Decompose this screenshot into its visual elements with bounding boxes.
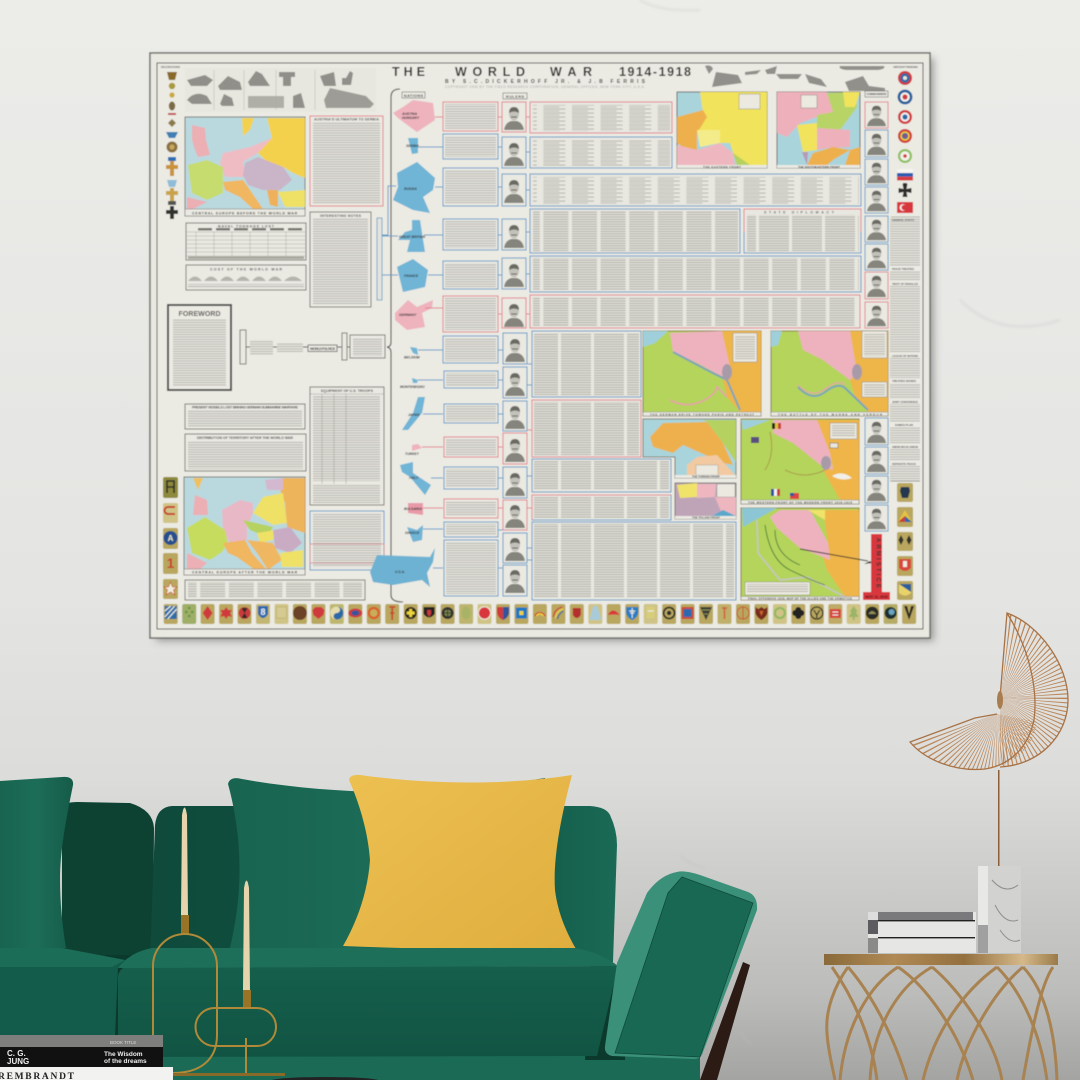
header: nations bbox=[402, 92, 425, 98]
nation: Turkey: TURKEY bbox=[405, 452, 420, 456]
fan hub bbox=[997, 691, 1003, 709]
poster shadow bbox=[156, 58, 934, 641]
map: western front 1915: THE BATTLE OF THE MARNE AND VERDUN bbox=[778, 412, 882, 416]
nation data boxes bbox=[443, 102, 498, 596]
title: 1914-1918 bbox=[619, 65, 691, 79]
panel: state diplomacy bbox=[744, 209, 861, 253]
table: naval tonnage lost bbox=[186, 223, 306, 260]
nation connector lines bbox=[418, 117, 443, 568]
right text column: TREATIES SIGNED bbox=[892, 379, 916, 383]
decorations column: DECORATIONS bbox=[161, 65, 180, 69]
nation: Russia: RUSSIA bbox=[404, 187, 417, 191]
panel: Great Britain narrative bbox=[530, 209, 740, 253]
table: equipment of US troops: EQUIPMENT OF U.S. TROOPS bbox=[321, 389, 374, 393]
narrative panels bbox=[530, 102, 861, 600]
aircraft illustrations strip bbox=[705, 65, 885, 91]
flow diagram: causes to world politics: WORLD POLITICS bbox=[310, 347, 336, 351]
right text column: PEACE TREATIES bbox=[892, 267, 914, 271]
header: allied commanders bbox=[865, 91, 888, 97]
nation: Germany: GERMANY bbox=[399, 313, 417, 317]
header: rulers bbox=[503, 93, 527, 99]
sofa back: right cushion bbox=[150, 806, 617, 962]
decorations column bbox=[161, 65, 180, 219]
panel: Bulgaria narrative bbox=[532, 495, 671, 520]
ruler portraits bbox=[502, 102, 527, 596]
panel: Italy narrative bbox=[532, 459, 671, 492]
nation: Bulgaria bbox=[404, 503, 423, 515]
map: western front 1915 bbox=[771, 331, 888, 416]
panel: Austria-Hungary narrative bbox=[530, 102, 672, 133]
panel: Turkey narrative bbox=[532, 400, 641, 457]
nation: Italy bbox=[400, 462, 431, 495]
title: BY S.C.DICKERHOFF JR. & J.B FERRIS bbox=[445, 79, 646, 85]
armistice column: NOV. 11, 1918 bbox=[866, 595, 888, 599]
timeline bracket bbox=[387, 89, 403, 602]
map: the eastern front: THE EASTERN FRONT bbox=[703, 165, 741, 169]
bottom shoulder insignia row bbox=[164, 604, 916, 624]
nation: Great Britain bbox=[398, 220, 426, 252]
left shoulder insignia column: 1 bbox=[167, 555, 175, 571]
wall marble veins bbox=[640, 0, 1060, 1045]
icon: aircraft roundels and flags bbox=[897, 71, 913, 213]
nation: USA bbox=[370, 548, 435, 587]
sofa base bbox=[160, 1054, 700, 1080]
commander portraits bbox=[865, 102, 888, 531]
nation: Japan: JAPAN bbox=[408, 413, 420, 417]
table: equipment of US troops bbox=[310, 387, 384, 505]
map: western front 1918: FINAL OFFENSIVE 1918, MAP OF THE ALLIES AND THE ARMISTICE bbox=[748, 596, 852, 600]
map: the southeastern front bbox=[777, 92, 860, 169]
dark gap between seats bbox=[105, 955, 165, 1080]
arrow to armistice bbox=[800, 549, 868, 561]
armistice column bbox=[863, 534, 890, 600]
panel: Belgium narrative bbox=[532, 331, 641, 397]
panel: France narrative bbox=[530, 256, 861, 292]
panel: Serbia narrative bbox=[530, 137, 672, 168]
table top bbox=[824, 954, 1058, 965]
wire fan sculpture bbox=[910, 613, 1068, 866]
right shoulder insignia column bbox=[897, 483, 913, 600]
top fan spokes bbox=[954, 651, 1048, 745]
panel: Austria's ultimatum to Serbia bbox=[310, 116, 383, 206]
sofa arm bbox=[605, 871, 757, 1059]
candle: short bbox=[243, 880, 250, 990]
stacked books bottom-left: of the dreams bbox=[104, 1058, 147, 1065]
header: nations: NATIONS bbox=[404, 94, 423, 98]
map: western front 1916-1917 bbox=[741, 419, 859, 504]
table: cost of the world war: COST OF THE WORLD WAR bbox=[210, 268, 282, 272]
panel: foreword bbox=[168, 305, 231, 390]
bottom shoulder insignia row: 8 bbox=[260, 607, 266, 617]
stacked books on table bbox=[868, 912, 976, 953]
flow diagram: causes to world politics bbox=[240, 330, 385, 364]
stacked books bottom-left: BOOK TITLE bbox=[110, 1040, 136, 1045]
nation: France bbox=[397, 259, 428, 292]
allies connector column bbox=[377, 186, 398, 300]
stacked books bottom-left: The Wisdom bbox=[104, 1051, 143, 1058]
war illustrations strip bbox=[185, 68, 376, 112]
nation: Bulgaria: BULGARIA bbox=[404, 507, 422, 511]
right text column: TREATY OF VERSAILLES bbox=[892, 282, 918, 286]
stacked books bottom-left: JUNG bbox=[7, 1057, 29, 1066]
panel: bottom text bbox=[185, 580, 365, 600]
map: the eastern front bbox=[677, 92, 767, 169]
panel: distribution of territory: DISTRIBUTION OF TERRITORY AFTER THE WORLD WAR bbox=[197, 436, 293, 440]
nation: France: FRANCE bbox=[404, 274, 419, 278]
title bbox=[392, 65, 691, 89]
side table bbox=[824, 954, 1058, 1080]
nation: Russia bbox=[393, 162, 435, 213]
right text column: DAWES PLAN bbox=[895, 423, 913, 427]
map: central Europe after the war bbox=[184, 477, 305, 575]
icon: flags on the map bbox=[751, 423, 838, 499]
sofa seat: right bbox=[118, 966, 618, 1057]
nation: USA: U.S.A. bbox=[395, 570, 405, 574]
green sofa bbox=[0, 775, 757, 1080]
sofa back: left cushion bbox=[62, 802, 154, 962]
pillow: far-left green bbox=[0, 777, 73, 948]
panel: interesting notes bbox=[310, 212, 371, 307]
map: western front 1916-1917: THE WESTERN FRONT OF THE MODERN FRONT 1916-1918 bbox=[748, 500, 852, 504]
nation: Austria-Hungary: AUSTRIA bbox=[401, 112, 418, 116]
right text column: AMERICANS IN LONDON bbox=[892, 445, 918, 449]
title: WAR bbox=[550, 65, 592, 79]
map: the Turkish front: THE TURKISH FRONT bbox=[692, 475, 720, 479]
header: rulers: RULERS bbox=[506, 95, 524, 99]
table: naval tonnage lost: NAVAL TONNAGE LOST bbox=[218, 224, 275, 228]
armistice column: ARMISTICE bbox=[874, 538, 880, 588]
map: central Europe after the war: CENTRAL EUROPE AFTER THE WORLD WAR bbox=[192, 570, 298, 574]
panel: USA narrative bbox=[532, 522, 736, 600]
table: casualties bbox=[310, 511, 384, 570]
title: COPYRIGHT 1939 BY THE FIELD RESEARCH CORPORATION, GENERAL OFFICES, NEW YORK CITY, U.S.A. bbox=[445, 85, 645, 89]
stacked books bottom-left bbox=[0, 1035, 173, 1080]
ruler connector lines bbox=[498, 117, 532, 568]
nation: Montenegro: MONTENEGRO bbox=[400, 385, 425, 389]
map: the Italian front: THE ITALIAN FRONT bbox=[692, 516, 720, 520]
header: allied commanders: COMMANDERS bbox=[866, 92, 887, 96]
panel: Russia narrative bbox=[530, 174, 861, 206]
table legs bbox=[827, 967, 1057, 1080]
right text column: SEPARATE PEACE bbox=[892, 462, 916, 466]
right text column: GENERAL STAFFS bbox=[892, 218, 914, 222]
right text column: JOINT CONFERENCE bbox=[892, 400, 918, 404]
pillow: yellow bbox=[343, 775, 576, 950]
panel: Austria's ultimatum to Serbia: AUSTRIA'S ULTIMATUM TO SERBIA bbox=[314, 118, 379, 122]
nation: Italy: ITALY bbox=[409, 476, 419, 480]
poster inner frame bbox=[157, 63, 923, 629]
nation: Serbia: SERBIA bbox=[406, 144, 419, 148]
map: central Europe before the war bbox=[185, 117, 305, 216]
title: WORLD bbox=[455, 65, 525, 79]
left shoulder insignia column: A bbox=[168, 534, 174, 543]
table: peerless vessels bbox=[185, 404, 305, 429]
nation: Greece bbox=[405, 525, 423, 542]
pillow: centre green bbox=[228, 778, 572, 948]
sofa seat: left bbox=[0, 948, 125, 1036]
map: the southeastern front: THE SOUTHEASTERN FRONT bbox=[798, 165, 840, 169]
nation: Montenegro bbox=[400, 378, 425, 389]
map: western front 1918 bbox=[741, 508, 859, 600]
marble block bbox=[978, 866, 1021, 953]
header: aircraft insignia: AIRCRAFT INSIGNIA bbox=[893, 65, 918, 69]
nation: Serbia bbox=[406, 138, 419, 154]
sofa leg bbox=[700, 962, 750, 1080]
gap between seat and arm bbox=[585, 965, 630, 1060]
map: the Italian front bbox=[675, 483, 736, 520]
fan rims bbox=[910, 613, 1068, 769]
panel: interesting notes: INTERESTING NOTES bbox=[320, 214, 362, 218]
right text column bbox=[890, 217, 920, 482]
table: cost of the world war bbox=[186, 265, 306, 290]
poster bbox=[150, 53, 930, 638]
map: western front 1914 bbox=[643, 331, 761, 416]
panel: state diplomacy: STATE DIPLOMACY bbox=[764, 210, 835, 214]
nation: Greece: GREECE bbox=[405, 531, 420, 535]
panel: Germany narrative bbox=[530, 295, 860, 328]
map: western front 1914: THE GERMAN DRIVE TOWARD PARIS AND RETREAT bbox=[650, 412, 754, 416]
title: THE bbox=[392, 65, 425, 79]
nation: Belgium bbox=[404, 347, 420, 360]
nation: Great Britain: GREAT BRITAIN bbox=[399, 235, 426, 239]
map: central Europe before the war: CENTRAL EUROPE BEFORE THE WORLD WAR bbox=[192, 211, 298, 215]
sofa arm inner face bbox=[615, 877, 753, 1057]
nation: Japan bbox=[402, 397, 425, 430]
lower fan spokes bbox=[913, 714, 1036, 769]
nation: Austria-Hungary: HUNGARY bbox=[402, 116, 420, 120]
map: the Turkish front bbox=[643, 419, 736, 479]
right text column: LEAGUE OF NATIONS bbox=[892, 354, 918, 358]
sculpture stem bbox=[998, 770, 1000, 866]
left shoulder insignia column bbox=[163, 477, 178, 599]
nation: Belgium: BELGIUM bbox=[404, 356, 420, 360]
nation: Germany bbox=[395, 300, 433, 330]
nation: Turkey bbox=[405, 444, 422, 456]
table: peerless vessels: PRESENT VESSELS LOST SINKING GERMAN SUBMARINE WARFARE bbox=[192, 406, 299, 410]
panel: foreword: FOREWORD bbox=[178, 311, 220, 318]
candle: tall bbox=[181, 808, 188, 915]
stacked books bottom-left: C. G. bbox=[7, 1049, 26, 1058]
holder rings bbox=[153, 934, 276, 1076]
candle holders bbox=[153, 808, 380, 1080]
panel: distribution of territory bbox=[185, 434, 306, 471]
nation: Austria-Hungary bbox=[393, 100, 435, 132]
